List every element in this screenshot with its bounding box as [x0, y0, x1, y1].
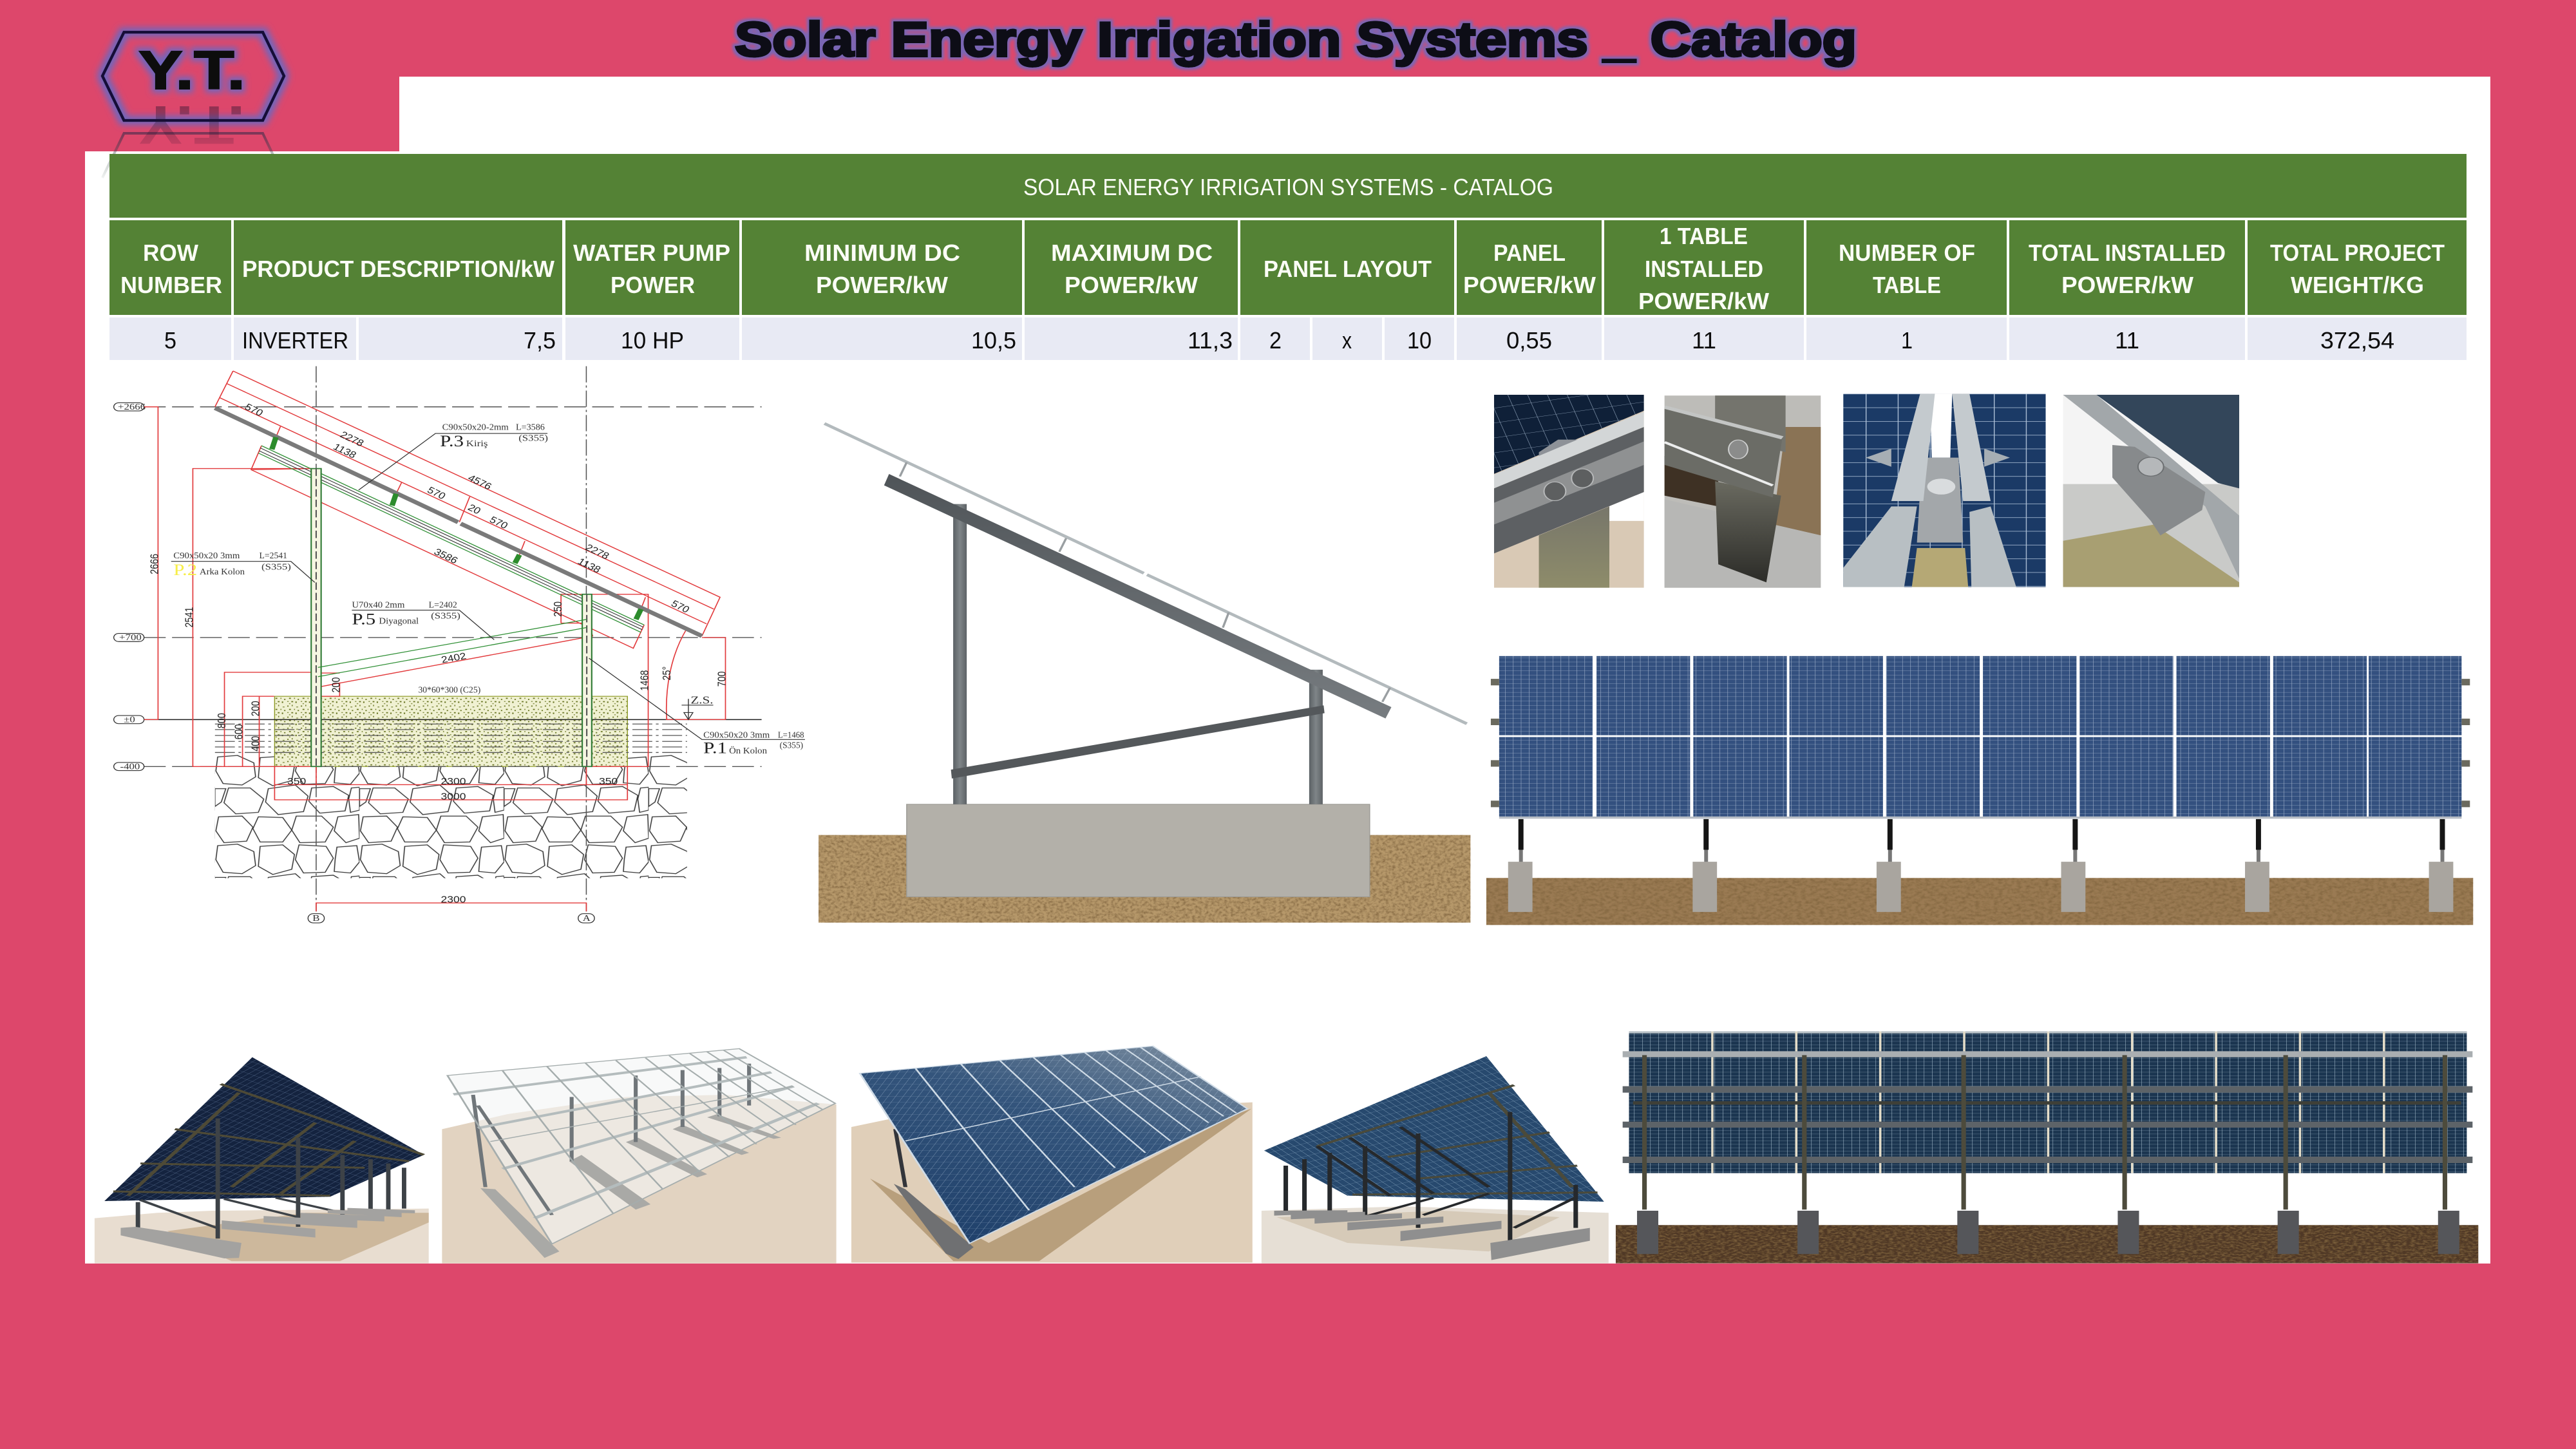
ground [442, 1095, 837, 1264]
foundation beams [480, 1114, 781, 1258]
level tags: -400 [120, 762, 140, 772]
photo: end clamp on module frame [2063, 395, 2239, 587]
white content panel [85, 77, 2490, 1264]
table header row: ROW [143, 240, 198, 266]
table header row: WEIGHT/KG [2291, 272, 2424, 298]
table header row: PANEL [1493, 240, 1566, 266]
perspective front view of panels [851, 1046, 1253, 1263]
perspective rear view, blue array [1262, 1056, 1609, 1264]
table data row: INVERTER [242, 327, 348, 354]
table data row: 7,5 [524, 327, 556, 354]
blue panel plane [860, 1046, 1247, 1244]
table data row: 0,55 [1506, 327, 1552, 354]
dimension labels: 3000 [441, 791, 466, 802]
table data row: 10,5 [971, 327, 1016, 354]
table header row: TOTAL PROJECT [2270, 240, 2445, 266]
module edge [824, 424, 1467, 724]
dimension labels: 2300 [441, 776, 466, 786]
table header row: POWER/kW [1065, 272, 1198, 298]
columns [953, 504, 1323, 804]
concrete blocks [1637, 1211, 2459, 1254]
table header row [109, 220, 2467, 315]
table header row: NUMBER OF [1839, 240, 1975, 266]
soil strip [1486, 878, 2473, 925]
dimension labels: 800 [216, 713, 228, 728]
table header row: INSTALLED [1645, 256, 1763, 282]
annotation: footing and ground level: Z.S. [690, 694, 714, 706]
table title row [109, 154, 2467, 218]
table header row: WATER PUMP [573, 240, 730, 266]
annotation: P.5 Diyagonal: L=2402 [429, 600, 457, 610]
dark soil [1616, 1225, 2478, 1264]
concrete beam and post [894, 1184, 974, 1259]
3D side view of mounting frame [819, 424, 1470, 923]
annotation: P.1 Ön Kolon: P.1 [703, 739, 727, 757]
glass panel plane [448, 1048, 835, 1244]
dimension labels: 570 [425, 485, 448, 502]
panel plane [1264, 1056, 1604, 1202]
annotation: P.5 Diyagonal [352, 600, 460, 629]
grid axis bubbles [308, 914, 594, 923]
dimension labels: 2278 [583, 542, 611, 562]
main rail [884, 474, 1392, 719]
table data row: 2 [1269, 327, 1282, 354]
annotation: P.2 Arka Kolon [173, 551, 291, 579]
technical side-elevation drawing [114, 366, 805, 923]
posts and braces [1286, 1112, 1576, 1242]
table header row: POWER/kW [1463, 272, 1596, 298]
table data row [109, 317, 2467, 360]
table header row: NUMBER [120, 272, 222, 298]
front elevation of 2x10 solar array [1486, 656, 2473, 925]
annotation: P.2 Arka Kolon: C90x50x20 3mm [173, 551, 240, 561]
ground [95, 1209, 429, 1264]
table title row: SOLAR ENERGY IRRIGATION SYSTEMS - CATALOG [1023, 174, 1553, 200]
annotation: P.3 Kiriş: C90x50x20-2mm [442, 422, 509, 432]
table header row: TABLE [1873, 272, 1941, 298]
logo: Y.T. hexagon with reflection: Y.T. [138, 40, 245, 100]
annotation: P.2 Arka Kolon: (S355) [261, 562, 291, 572]
table header row: 1 TABLE [1660, 223, 1748, 249]
frame posts [473, 1064, 749, 1215]
panels [1629, 1032, 2467, 1173]
annotation: P.2 Arka Kolon: P.2 [173, 561, 197, 579]
level tags: +2666 [118, 402, 146, 412]
table header row: POWER [611, 272, 695, 298]
annotation: P.5 Diyagonal: Diyagonal [379, 616, 419, 626]
table header row: TOTAL INSTALLED [2029, 240, 2226, 266]
annotation: P.1 Ön Kolon: C90x50x20 3mm [703, 730, 770, 740]
dimension labels: 1138 [576, 556, 603, 575]
annotation: P.1 Ön Kolon: L=1468 [778, 730, 804, 740]
photo: bolted beam joint [1494, 395, 1644, 588]
table data row: 10 [1407, 327, 1432, 354]
dimension labels: 2278 [338, 430, 366, 449]
table header row: MINIMUM DC [804, 240, 960, 266]
cross rails [1623, 1051, 2472, 1163]
table data row: 11 [2115, 327, 2139, 354]
dimension labels: 700 [715, 671, 728, 687]
dimension labels: 400 [249, 736, 262, 752]
annotation: P.3 Kiriş: P.3 [440, 433, 464, 450]
concrete blocks [120, 1208, 415, 1258]
diagonal brace [951, 705, 1325, 779]
dimension labels: 250 [552, 601, 564, 617]
dimension labels [148, 402, 728, 905]
dimension labels: 570 [488, 515, 510, 531]
grid axis bubbles: B [312, 914, 320, 923]
dimension labels: 200 [249, 701, 262, 716]
annotation: P.3 Kiriş [440, 422, 548, 450]
panel plane [104, 1057, 424, 1201]
posts and braces [138, 1119, 404, 1238]
leader lines [171, 433, 805, 739]
posts [1645, 1055, 2445, 1209]
rear elevation of array [1616, 1032, 2478, 1264]
table data row: 372,54 [2320, 327, 2394, 354]
columns and diagonal [311, 469, 592, 766]
level tags: ±0 [124, 715, 135, 724]
frame rails [1317, 1085, 1598, 1195]
grid axis bubbles: A [583, 914, 591, 923]
dimension labels: 2402 [440, 651, 468, 665]
logo: Y.T. hexagon with reflection: Y.T. [138, 95, 245, 155]
catalog table [109, 154, 2467, 360]
dimension labels: 2666 [148, 554, 161, 574]
concrete footing [274, 696, 627, 766]
concrete blocks [1274, 1210, 1590, 1260]
annotation: P.3 Kiriş: Kiriş [466, 439, 488, 449]
table data row: 1 [1901, 327, 1913, 354]
dimension labels: 2541 [183, 607, 196, 627]
table header row: MAXIMUM DC [1051, 240, 1213, 266]
dimension labels: 1138 [331, 442, 359, 460]
dimension labels: 20 [466, 502, 483, 516]
annotation: P.5 Diyagonal: U70x40 2mm [352, 600, 404, 610]
dimension labels: 200 [330, 677, 343, 692]
module grid [448, 1048, 835, 1244]
level tags [114, 402, 146, 772]
perspective rear view, dark array [95, 1057, 429, 1264]
purlins [453, 1057, 818, 1218]
dimension labels: 1468 [638, 670, 651, 691]
dimension labels: 570 [669, 598, 692, 615]
photo: mid clamp between modules [1843, 393, 2046, 587]
table data row: 11,3 [1188, 327, 1233, 354]
annotation: P.5 Diyagonal: (S355) [431, 611, 460, 621]
concrete footing [907, 804, 1370, 897]
logo: Y.T. hexagon with reflection [102, 32, 284, 178]
level tags: +700 [119, 632, 142, 643]
annotation: P.3 Kiriş: (S355) [518, 433, 548, 443]
annotation: P.2 Arka Kolon: L=2541 [260, 551, 287, 561]
annotation: P.3 Kiriş: L=3586 [516, 422, 545, 432]
dimension labels: 25° [661, 667, 673, 681]
solar panels [1491, 656, 2470, 819]
perspective frame structure with transparent panels [442, 1048, 837, 1264]
title: Solar Energy Irrigation Systems _ Catalog [735, 12, 1857, 66]
table header row: PRODUCT DESCRIPTION/kW [242, 256, 554, 282]
dimension labels: 3586 [431, 547, 460, 566]
annotation: footing and ground level [418, 685, 714, 719]
table data row: 5 [164, 327, 176, 354]
table header row: POWER/kW [1638, 288, 1769, 314]
detail photos [1494, 393, 2239, 588]
table data row: 10 HP [621, 327, 684, 354]
dimension labels: 350 [287, 776, 306, 786]
table data row: x [1342, 327, 1352, 354]
ground [1262, 1206, 1609, 1264]
panel grid lines [860, 1046, 1247, 1244]
annotation: P.1 Ön Kolon [703, 730, 804, 757]
dimension labels: 4576 [466, 473, 494, 492]
photo: column to rail connection [1665, 395, 1821, 588]
annotation: P.5 Diyagonal: P.5 [352, 611, 375, 629]
concrete blocks [1508, 862, 2453, 912]
frame rails [113, 1084, 424, 1196]
annotation: P.1 Ön Kolon: (S355) [780, 741, 803, 750]
clamps [900, 462, 1390, 702]
table data row: 11 [1692, 327, 1716, 354]
ground [851, 1103, 1253, 1263]
annotation: footing and ground level: 30*60*300 (C25) [418, 685, 480, 695]
panel gaps [1712, 1032, 2384, 1173]
dimension labels: 2300 [441, 895, 466, 905]
soil and stone hatch [215, 755, 687, 878]
table header row: POWER/kW [816, 272, 948, 298]
red dimension lines [144, 371, 725, 911]
annotation: P.1 Ön Kolon: Ön Kolon [729, 746, 767, 756]
annotation: P.2 Arka Kolon: Arka Kolon [200, 567, 245, 576]
dimension labels: 570 [242, 402, 265, 419]
dimension labels: 600 [232, 724, 245, 739]
module and rail [215, 408, 702, 636]
table header row: PANEL LAYOUT [1264, 256, 1432, 282]
soil [819, 835, 1470, 923]
dimension labels: 350 [599, 776, 618, 786]
table header row: POWER/kW [2061, 272, 2193, 298]
support legs [1521, 819, 2442, 850]
